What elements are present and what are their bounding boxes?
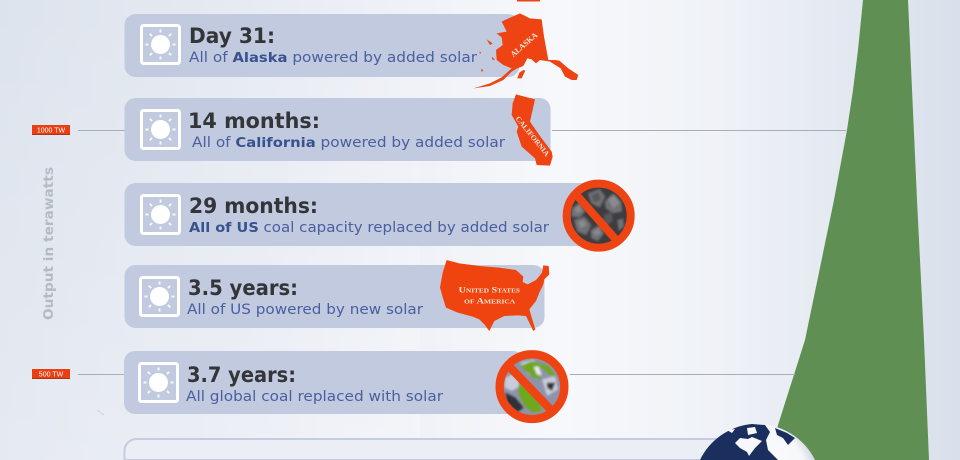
heading: Day 31: <box>189 24 275 48</box>
icon: California map: CALIFORNIA <box>514 114 552 159</box>
icon: sun <box>140 278 178 316</box>
description: All of Alaska powered by added solar <box>189 50 477 66</box>
icon: sun <box>142 196 180 234</box>
icon: Alaska map <box>473 13 578 88</box>
panel: bottom summary box <box>124 439 730 460</box>
gridline: 500 TW <box>78 374 795 376</box>
green solar growth area <box>770 0 929 460</box>
icon: United States map <box>440 260 549 331</box>
description: All of California powered by added solar <box>192 135 505 151</box>
icon: sun <box>142 110 180 148</box>
axis tag: 500 TW: 500 TW <box>39 372 64 378</box>
top edge fragment of previous map <box>517 0 540 2</box>
axis tag: 500 TW <box>32 369 70 379</box>
panel: 3.7 years <box>124 351 524 414</box>
icon: sun <box>142 26 180 64</box>
axis tag: 1000 TW: 1000 TW <box>37 128 66 134</box>
heading: 3.7 years: <box>187 363 296 387</box>
panel: Day 31 <box>124 14 520 77</box>
description: All of US powered by new solar <box>187 302 423 318</box>
panel: 29 months <box>124 183 594 246</box>
axis label: Output in terawatts <box>42 167 57 320</box>
icon: no global coal <box>500 354 564 419</box>
icon: United States map: United States <box>459 286 521 295</box>
gridline: 1000 TW <box>78 130 846 132</box>
icon: United States map: of America <box>464 296 516 305</box>
icon: Alaska map: ALASKA <box>509 31 539 59</box>
icon: no coal <box>567 184 631 248</box>
heading: 14 months: <box>188 109 320 133</box>
description: All of US coal capacity replaced by added solar <box>189 220 549 236</box>
panel: 3.5 years <box>124 265 544 328</box>
heading: 3.5 years: <box>188 276 298 300</box>
panel: 14 months <box>124 98 550 161</box>
icon: globe <box>700 424 815 460</box>
description: All global coal replaced with solar <box>186 389 443 405</box>
icon: California map <box>512 94 553 166</box>
heading: 29 months: <box>189 194 318 218</box>
axis tag: 1000 TW <box>32 125 70 135</box>
icon: sun <box>140 364 178 402</box>
